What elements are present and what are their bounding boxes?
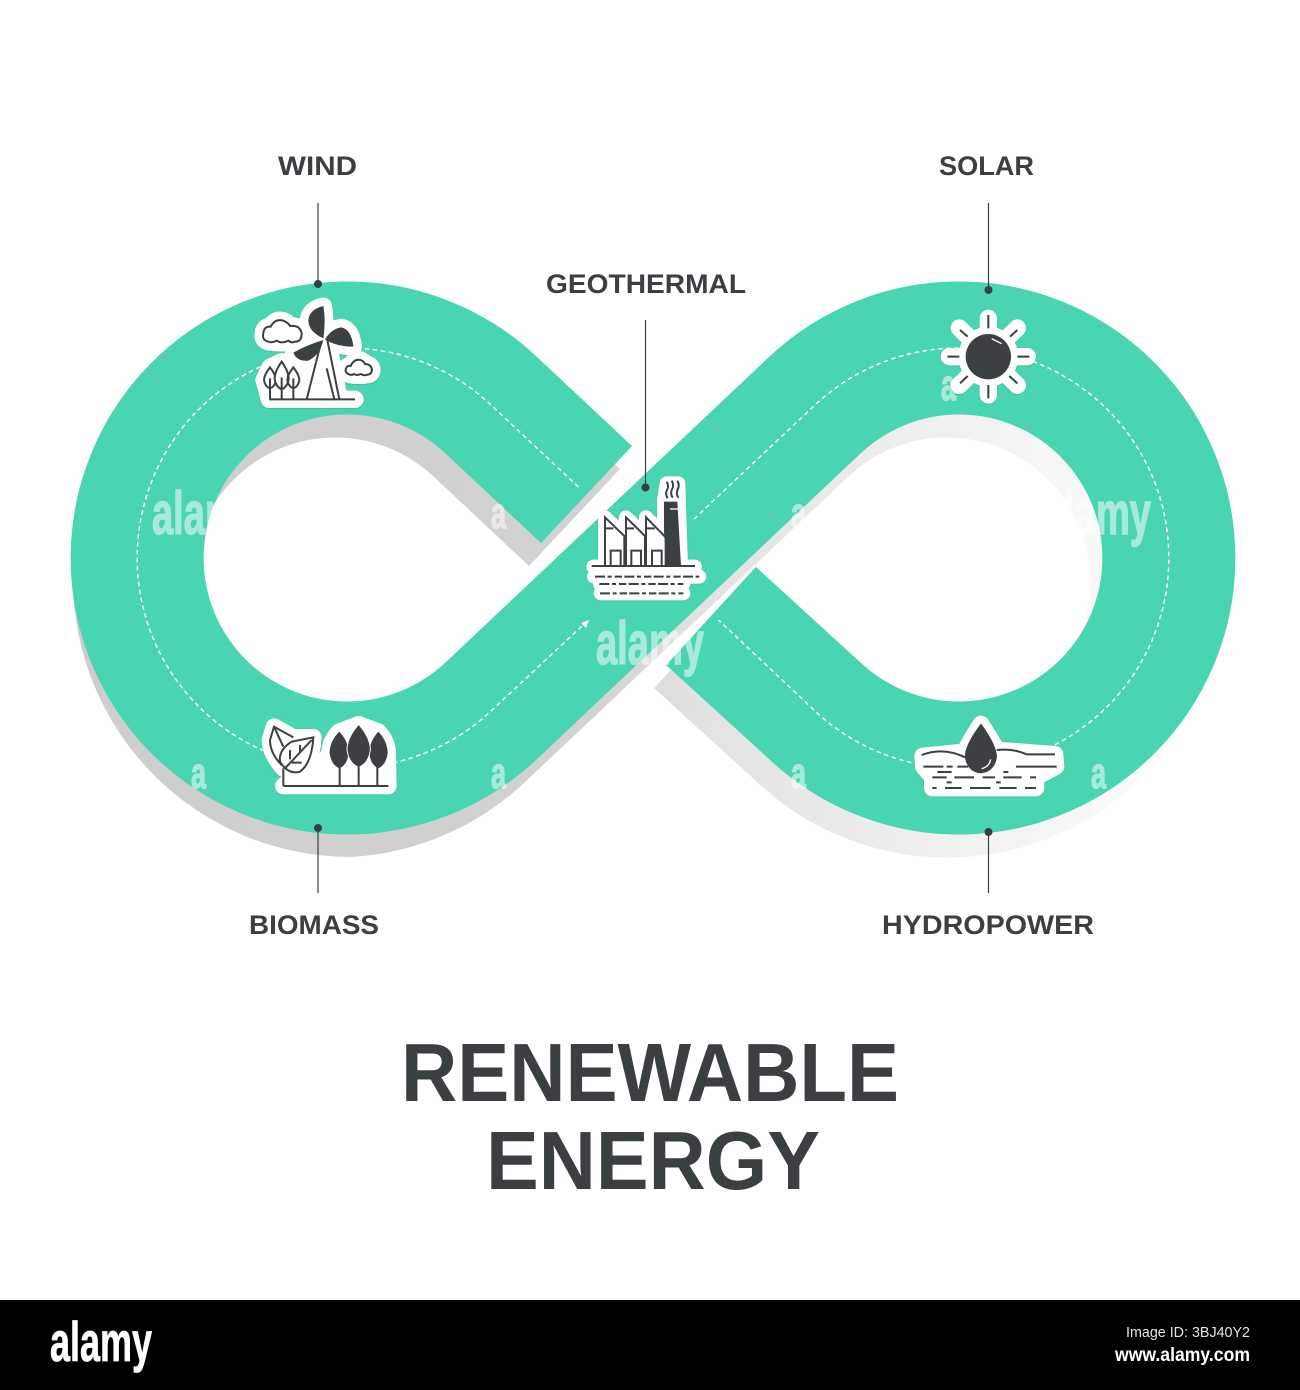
leader: hydropower [984, 828, 992, 893]
icon: wind [263, 306, 372, 399]
dashed route: right loop [694, 348, 1169, 768]
watermarks: alamy [1043, 480, 1151, 547]
footer bar: alamy [50, 1310, 152, 1373]
leader: wind [314, 203, 322, 288]
leader: geothermal [642, 320, 650, 492]
title: ENERGY [486, 1114, 820, 1207]
footer bar: Image ID: 3BJ40Y2 [1126, 1324, 1250, 1341]
label: biomass: BIOMASS [249, 910, 379, 940]
watermarks [152, 361, 1151, 798]
title: RENEWABLE [401, 1026, 899, 1119]
watermarks: a [791, 489, 806, 538]
watermarks: a [1091, 749, 1106, 798]
watermarks: a [491, 489, 506, 538]
label: solar: SOLAR [939, 151, 1034, 181]
footer bar: www.alamy.com [1114, 1345, 1250, 1366]
icon: geothermal [592, 481, 699, 593]
footer bar [0, 1300, 1300, 1390]
watermarks: a [191, 749, 206, 798]
title [401, 1026, 899, 1207]
dashed route: left loop with arrow [137, 348, 589, 768]
watermarks: alamy [596, 610, 704, 677]
leader: biomass [314, 824, 322, 893]
icon: solar [947, 315, 1029, 398]
icon: hydropower [922, 723, 1057, 788]
label: hydropower: HYDROPOWER [882, 910, 1094, 940]
infinity band shadow [125, 371, 1157, 791]
label: geothermal: GEOTHERMAL [546, 269, 746, 299]
watermarks: a [491, 749, 506, 798]
leader: solar [984, 203, 992, 294]
infinity band [137, 348, 1169, 768]
watermarks: a [791, 749, 806, 798]
label: wind: WIND [278, 151, 357, 181]
watermarks: alamy [152, 480, 260, 547]
icon: biomass [270, 724, 388, 786]
watermarks: a [941, 361, 956, 410]
